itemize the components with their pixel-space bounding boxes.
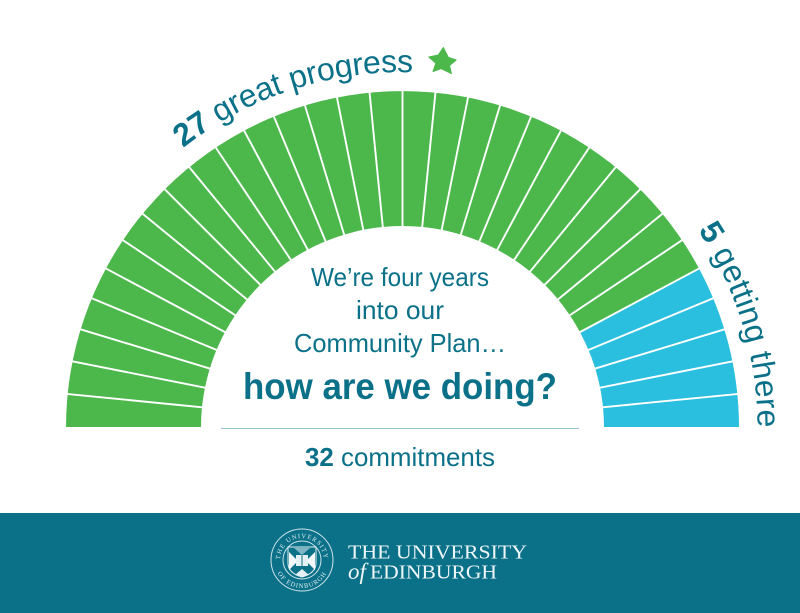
curved label: 5 getting there: 5 getting there bbox=[700, 220, 776, 426]
centre question heading: how are we doing? bbox=[243, 366, 557, 407]
icon: university seal: OF EDINBURGH bbox=[278, 572, 326, 588]
segments: 27 great progress bbox=[66, 91, 699, 427]
centre intro text: Community Plan… bbox=[294, 328, 506, 358]
centre intro text: We’re four years bbox=[311, 262, 489, 292]
segments: 5 getting there bbox=[580, 269, 739, 427]
footer band bbox=[0, 513, 800, 613]
wordmark: The University of Edinburgh: of bbox=[348, 559, 370, 584]
wordmark: The University of Edinburgh bbox=[348, 542, 527, 584]
wordmark: The University of Edinburgh: THE UNIVERSITY bbox=[348, 542, 527, 564]
icon: star bbox=[429, 48, 456, 74]
shield: saltire triangles bbox=[289, 552, 315, 570]
centre intro text: into our bbox=[356, 295, 444, 325]
total: 32 commitments: 32 commitments bbox=[305, 442, 495, 472]
semicircle chart: 32 commitments bbox=[62, 84, 743, 427]
icon: university seal bbox=[270, 528, 334, 592]
divider line bbox=[221, 428, 579, 430]
icon: university seal: THE UNIVERSITY bbox=[276, 534, 328, 559]
wordmark: The University of Edinburgh: EDINBURGH bbox=[370, 562, 497, 584]
centre intro text bbox=[294, 262, 506, 358]
shield: open book bbox=[296, 555, 302, 566]
curved label: 27 great progress: 27 great progress bbox=[173, 55, 412, 148]
